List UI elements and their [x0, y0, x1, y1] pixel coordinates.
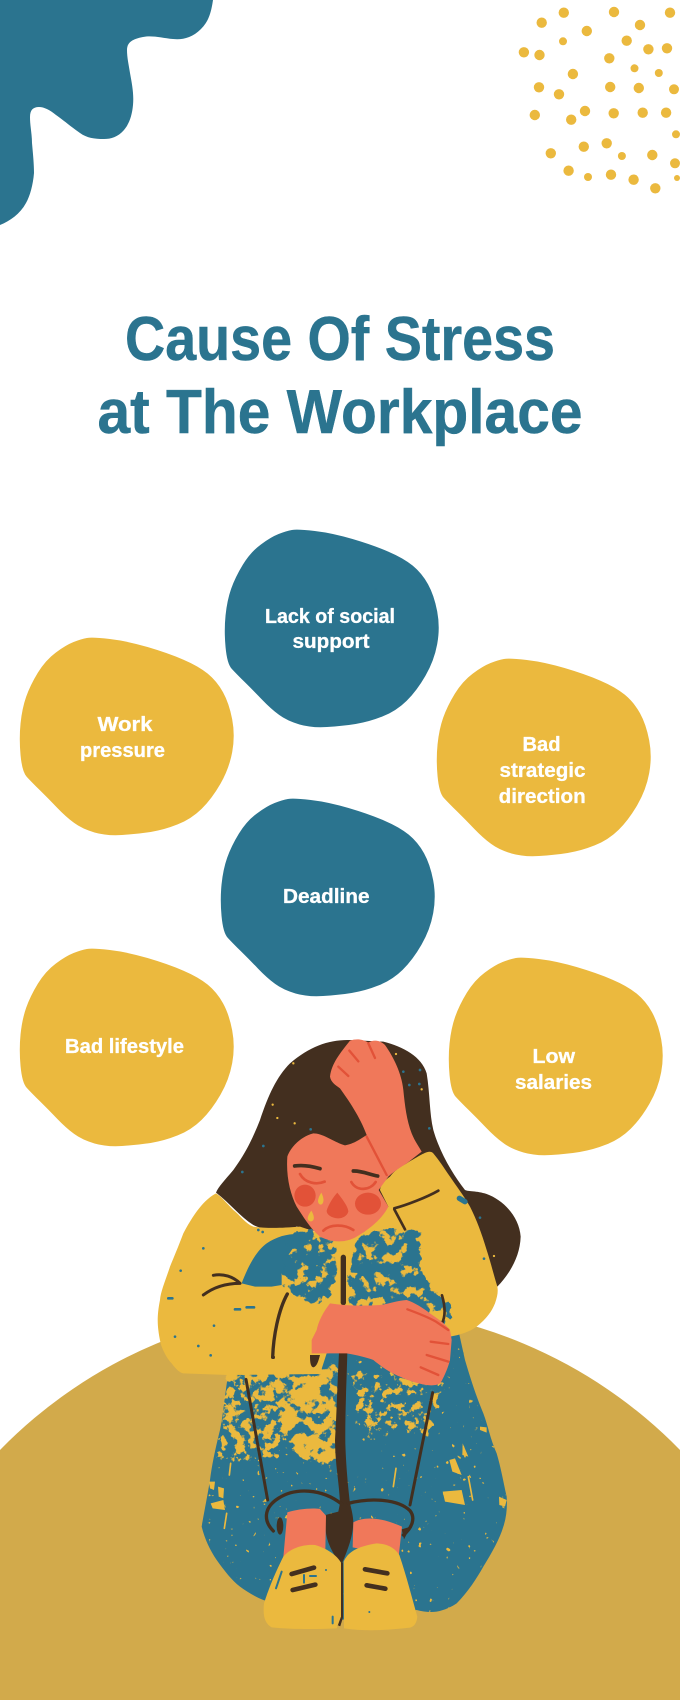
- bubble: work pressure: pressure: [80, 740, 165, 762]
- bubble: low salaries: salaries: [515, 1072, 592, 1094]
- top-left wavy blob: [0, 0, 213, 225]
- bubble: low salaries: [449, 958, 663, 1155]
- tears: [308, 1193, 324, 1221]
- title: at The Workplace: [98, 378, 582, 447]
- bubble: bad lifestyle: [20, 949, 234, 1146]
- socks: [283, 1509, 402, 1557]
- bubble: lack of social support: support: [292, 631, 370, 653]
- bubble: work pressure: [20, 638, 234, 835]
- raised arm and fist: [330, 1039, 422, 1177]
- bubble: bad strategic direction: [437, 659, 651, 856]
- lower-body lines, zipper and knee outlines: [246, 1353, 433, 1630]
- bubble: bad strategic direction: direction: [499, 786, 586, 808]
- cheeks and nose: [294, 1185, 381, 1218]
- bubble: bad lifestyle: Bad lifestyle: [65, 1036, 184, 1058]
- illustration: stressed woman sitting: [158, 1039, 521, 1630]
- teal paint speckle on chest: [168, 1225, 457, 1332]
- title: [98, 305, 582, 447]
- title: Cause Of Stress: [125, 305, 555, 374]
- face: [287, 1133, 388, 1241]
- decorative dot cluster: [519, 7, 680, 193]
- shoes: [264, 1545, 341, 1629]
- hair: [216, 1040, 521, 1287]
- zipper top: [335, 1257, 351, 1303]
- bubble: lack of social support: Lack of social: [265, 606, 395, 628]
- teal flecks on sweater and hair: [175, 1070, 484, 1357]
- bubble: bad strategic direction: Bad: [522, 734, 560, 756]
- bubble: work pressure: Work: [98, 714, 153, 736]
- bubble: bad strategic direction: strategic: [500, 760, 586, 782]
- mouth: [323, 1226, 353, 1231]
- bubble: lack of social support: [225, 530, 439, 727]
- sleeve fold lines: [203, 1275, 240, 1295]
- bubble: deadline: Deadline: [283, 886, 370, 908]
- bubble: deadline: [221, 799, 435, 996]
- brows and eyelids: [295, 1166, 378, 1176]
- lower body dress: [202, 1330, 507, 1620]
- yellow sweater and sleeves: [158, 1152, 498, 1375]
- bubble: low salaries: Low: [532, 1046, 575, 1068]
- hand holding arm: [312, 1300, 452, 1385]
- yellow paint speckle on dress: [202, 1330, 507, 1620]
- ground hill: [0, 1307, 680, 1700]
